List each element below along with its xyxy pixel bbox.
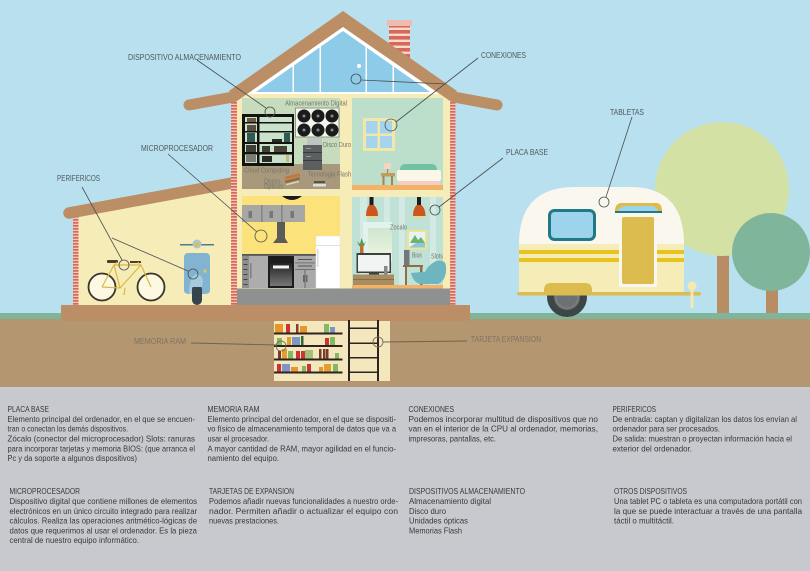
callout: conexiones: CONEXIONES [481, 50, 526, 60]
callout: conexiones [351, 50, 526, 131]
text block: perifericos [612, 404, 797, 454]
text block: placa base: PLACA BASE [8, 404, 49, 414]
text block: memoria ram [208, 404, 396, 463]
roof [189, 11, 497, 105]
storage labels: Almacenamiento Digital [285, 100, 347, 108]
text block: tarjetas de expansion [209, 486, 398, 526]
storage labels: Disco Duro [323, 142, 351, 149]
side table and tower [403, 250, 423, 285]
scooter [180, 240, 214, 305]
television [356, 253, 391, 275]
callout: memoria ram [134, 336, 286, 351]
pantry shelves [274, 332, 342, 374]
living labels: Bios [412, 252, 422, 260]
pantry items [275, 324, 339, 372]
text block: conexiones: CONEXIONES [408, 404, 454, 414]
caravan window [550, 210, 594, 240]
storage labels [244, 100, 351, 190]
text block: tarjetas de expansion: nador. Permiten añadir o actualizar el equipo con [209, 506, 398, 516]
text block: placa base: Zócalo (conector del microprocesador) Slots: ranuras [8, 434, 195, 444]
callout: perifericos [57, 173, 198, 279]
text block: microprocesador [10, 486, 197, 545]
text block: dispositivos almacenamiento: Disco duro [409, 506, 446, 516]
ladder [348, 320, 379, 381]
text block: otros dispositivos: táctil o multitáctil. [614, 516, 674, 526]
text block: memoria ram: usar el procesador. [208, 434, 269, 444]
text panel background [0, 387, 810, 571]
tree: large light green [655, 122, 789, 314]
living labels [390, 224, 443, 260]
room: kitchen [242, 196, 340, 288]
chimney [387, 20, 412, 62]
storage labels: Cloud Computing [244, 168, 289, 174]
callout: tabletas: TABLETAS [610, 107, 644, 117]
text block: memoria ram: namiento del equipo. [208, 453, 279, 463]
callout: placa base [430, 147, 548, 215]
callout: perifericos: PERIFERICOS [57, 173, 100, 183]
callout: tarjeta expansion [373, 334, 541, 347]
storage labels: Discos [264, 178, 280, 186]
text block: placa base [8, 404, 195, 463]
text block: perifericos: exterior del ordenador. [612, 444, 692, 454]
text block: placa base: Pc y da soporte a algunos dispositivos) [8, 453, 137, 463]
hard disk cabinet [303, 138, 322, 170]
hanging lamps [366, 197, 426, 218]
text block: memoria ram: MEMORIA RAM [208, 404, 260, 414]
text block: tarjetas de expansion: Podemos añadir nuevas funcionalidades a nuestro orde- [209, 496, 398, 506]
light from window [363, 222, 392, 262]
basement [274, 320, 390, 381]
bicycle [88, 260, 164, 300]
callout: memoria ram: MEMORIA RAM [134, 336, 186, 346]
text block: conexiones: van en el interior de la CPU al ordenador, memorias, [408, 424, 598, 434]
text block: microprocesador: MICROPROCESADOR [10, 486, 80, 496]
brick columns [231, 100, 456, 305]
caravan awning [615, 203, 662, 213]
text block: otros dispositivos: la que se puede interactuar a través de una pantalla [614, 506, 802, 516]
text block: conexiones [408, 404, 598, 444]
bookshelf [242, 114, 294, 166]
counter and oven [242, 254, 316, 288]
gray floor slab [237, 288, 450, 305]
text block: perifericos: PERIFERICOS [612, 404, 656, 414]
text block: otros dispositivos: OTROS DISPOSITIVOS [614, 486, 687, 496]
text block: tarjetas de expansion: nuevas prestaciones. [209, 516, 279, 526]
extractor hood [273, 222, 288, 243]
tv cabinet [353, 274, 394, 285]
storage speakers [296, 108, 339, 137]
grass strip [0, 313, 810, 319]
callout: microprocesador [141, 143, 267, 242]
callout: tarjeta expansion: TARJETA EXPANSION [471, 334, 541, 344]
bed [397, 164, 441, 185]
text block: dispositivos almacenamiento: DISPOSITIVOS ALMACENAMIENTO [409, 486, 525, 496]
text block: dispositivos almacenamiento [409, 486, 525, 536]
room: living [352, 197, 446, 289]
text block: dispositivos almacenamiento: Almacenamiento digital [409, 496, 491, 506]
text block: memoria ram: Elemento principal del ordenador, en el que se dispositi- [208, 414, 396, 424]
optical discs and flash [285, 173, 326, 186]
caravan [517, 187, 701, 317]
house foundation [61, 305, 470, 321]
text block: otros dispositivos [614, 486, 802, 526]
caravan door [619, 215, 657, 287]
caravan wheel [547, 277, 587, 317]
caravan jack [688, 282, 696, 308]
attic window [247, 26, 439, 94]
bedroom window [363, 118, 395, 151]
text block: tarjetas de expansion: TARJETAS DE EXPANSION [209, 486, 294, 496]
garage shed [69, 183, 232, 305]
room: storage [242, 98, 351, 190]
room: bedroom [352, 98, 443, 190]
text block: dispositivos almacenamiento: Memorias Flash [409, 526, 462, 536]
text block: dispositivos almacenamiento: Unidades ópticas [409, 516, 468, 526]
caravan chassis [517, 283, 701, 296]
text block: microprocesador: cálculos. Realiza las operaciones aritmético-lógicas de [10, 516, 197, 526]
text block: memoria ram: A mayor cantidad de RAM, mayor agilidad en el funcio- [208, 444, 396, 454]
callout: placa base: PLACA BASE [506, 147, 548, 157]
living labels: Slots [431, 254, 443, 260]
callout: tabletas [599, 107, 644, 207]
callout: dispositivo almacenamiento: DISPOSITIVO ALMACENAMIENTO [128, 52, 241, 62]
text block: placa base: para incorporar tarjetas y memoria BIOS: (que arranca el [8, 444, 195, 454]
nightstand lamp [381, 163, 395, 185]
callout: microprocesador: MICROPROCESADOR [141, 143, 213, 153]
text block: perifericos: ordenador para ser procesados. [612, 424, 720, 434]
text block: perifericos: De salida: muestran o proyectan información hacia el [612, 434, 792, 444]
storage labels: Opticos [264, 184, 283, 190]
armchair [411, 261, 446, 284]
text block: microprocesador: central de nuestro equipo informático. [10, 535, 139, 545]
living labels: Zocalo [390, 224, 407, 232]
house walls [237, 27, 450, 305]
fridge [316, 236, 340, 288]
plant [357, 238, 366, 254]
text block: placa base: tran o conectan los demás dispositivos. [8, 424, 128, 434]
picture [407, 230, 427, 250]
ground [0, 319, 810, 387]
text block: microprocesador: datos que requerimos al usar el ordenador. Es la pieza [10, 526, 197, 536]
wall cabinets [242, 205, 305, 222]
text block: conexiones: Podemos incorporar multitud de dispositivos que no [408, 414, 598, 424]
text block: microprocesador: Dispositivo digital que contiene millones de elementos [10, 496, 197, 506]
tree: small green [732, 213, 810, 314]
text block: placa base: Elemento principal del ordenador, en el que se encuen- [8, 414, 195, 424]
text block: microprocesador: electrónicos en un único circuito integrado para realizar [10, 506, 197, 516]
text block: memoria ram: vo físico de almacenamiento temporal de datos que va a [208, 424, 396, 434]
callout: dispositivo almacenamiento [128, 52, 275, 117]
storage labels: Tecnologia Flash [308, 172, 351, 178]
text block: conexiones: impresoras, pantallas, etc. [408, 434, 496, 444]
sky background [0, 0, 810, 320]
